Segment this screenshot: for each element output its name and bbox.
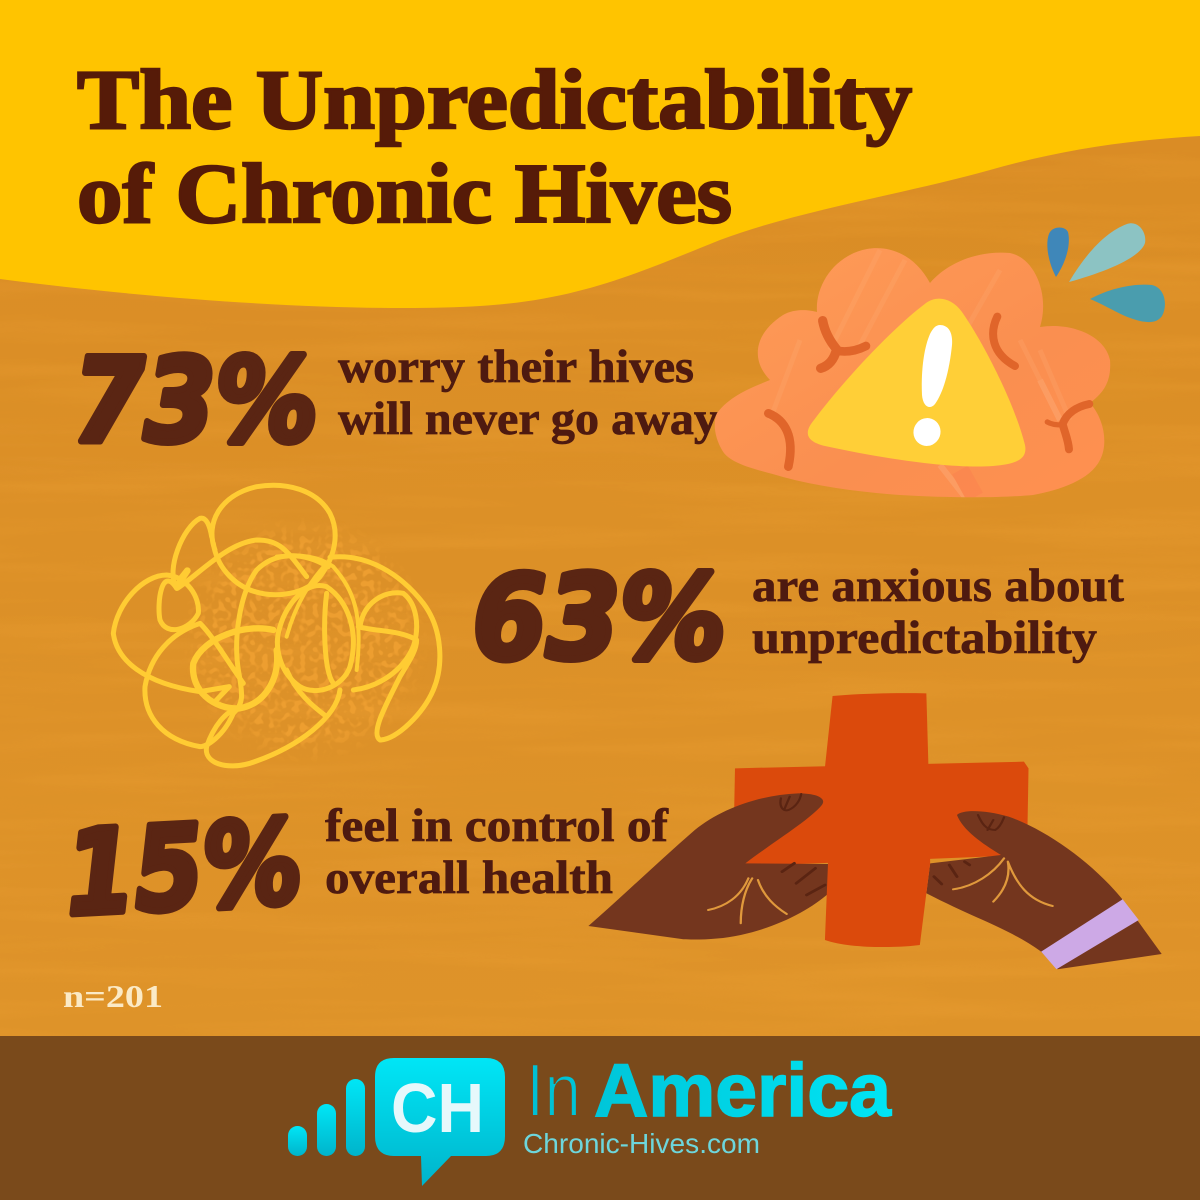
bracelet xyxy=(1041,899,1139,969)
cross vertical bar xyxy=(825,693,930,947)
America: America xyxy=(594,1048,892,1132)
website: Chronic-Hives.com xyxy=(523,1128,760,1159)
yellow header wave xyxy=(0,0,1200,308)
text: feel in control of overall health: overall health xyxy=(325,852,613,904)
footer bar xyxy=(0,1036,1200,1200)
title xyxy=(77,53,912,241)
text: are anxious about unpredictability: unpredictability xyxy=(752,612,1098,664)
text: worry their hives will never go away xyxy=(338,341,719,445)
stat: 15 percent xyxy=(63,795,669,942)
text: worry their hives will never go away: will never go away xyxy=(338,393,719,445)
stipple xyxy=(180,515,430,765)
warning triangle xyxy=(808,299,1025,466)
signal bars xyxy=(288,1079,365,1156)
number: 15%: 15% xyxy=(63,795,305,942)
scribble lines xyxy=(113,485,440,766)
stat: 63 percent xyxy=(473,551,1124,686)
left hand xyxy=(588,793,829,940)
icon: worried cloud with warning triangle xyxy=(715,223,1165,497)
hand lines xyxy=(708,794,1053,923)
speech bubble xyxy=(375,1058,505,1186)
title: of Chronic Hives xyxy=(77,147,732,241)
cross horizontal arm xyxy=(733,762,1029,867)
cloud xyxy=(715,248,1110,497)
sample size note: n=201 xyxy=(63,978,163,1014)
stat: 73 percent xyxy=(73,334,719,469)
cracks xyxy=(768,317,1089,467)
sweat drops xyxy=(1047,223,1165,322)
icon: tangled scribble xyxy=(113,485,440,766)
number: 63%: 63% xyxy=(473,551,726,686)
text: feel in control of overall health xyxy=(325,800,669,904)
right hand xyxy=(926,811,1162,969)
text: feel in control of overall health: feel in control of xyxy=(325,800,669,852)
logo: CH InAmerica xyxy=(288,1048,892,1186)
CH letters: CH xyxy=(391,1069,484,1147)
In: In xyxy=(526,1048,581,1132)
text: are anxious about unpredictability: are anxious about xyxy=(752,560,1124,612)
number: 73%: 73% xyxy=(73,334,318,469)
text: are anxious about unpredictability xyxy=(752,560,1124,664)
exclamation mark xyxy=(910,325,952,450)
text: worry their hives will never go away: worry their hives xyxy=(338,341,694,393)
icon: hands holding medical cross xyxy=(588,693,1162,969)
title: The Unpredictability xyxy=(77,53,912,147)
